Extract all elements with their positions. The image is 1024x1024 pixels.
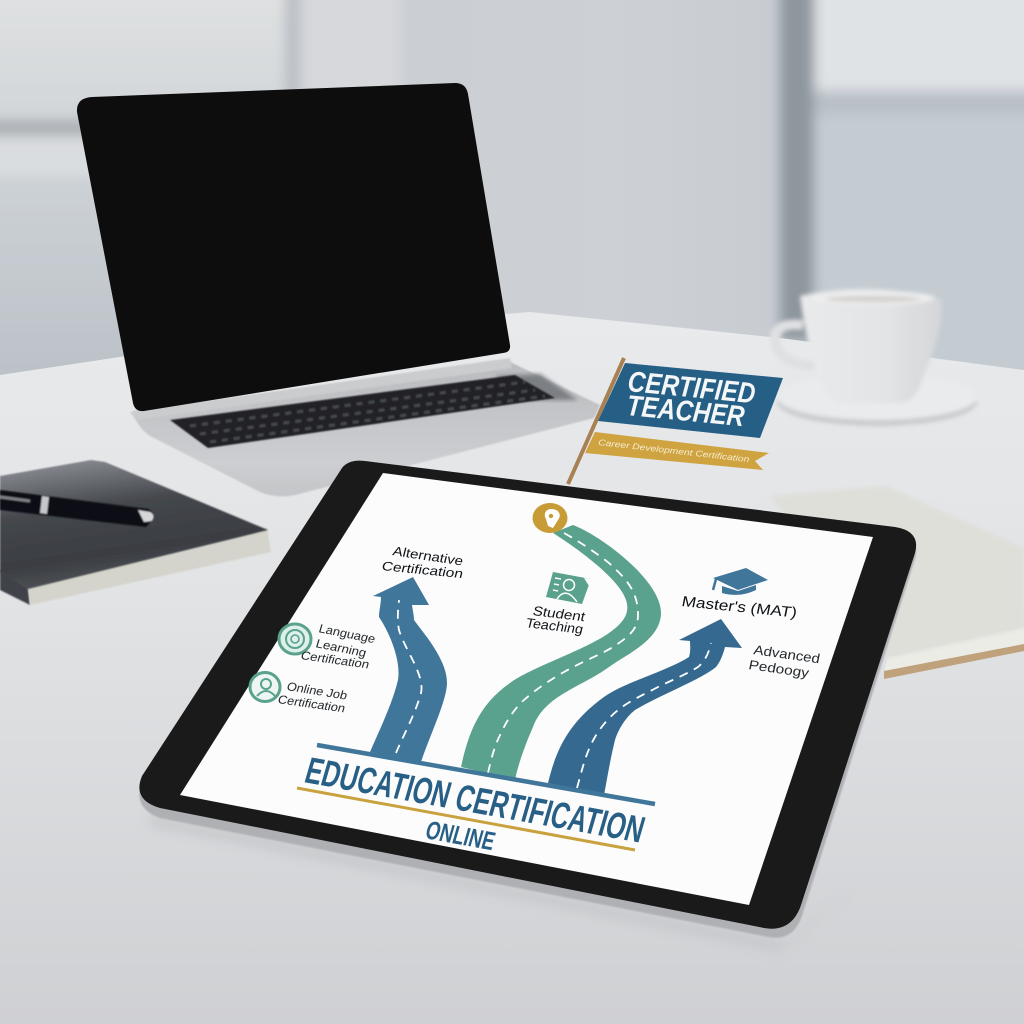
flag gold ribbon — [585, 432, 769, 470]
table surface — [0, 312, 1024, 1024]
label: language learning certification — [299, 621, 378, 671]
flag pole — [568, 358, 624, 484]
gold underline — [297, 788, 635, 850]
label: language learning certification: Certification — [299, 648, 371, 671]
subtitle: ONLINE — [422, 817, 498, 856]
flag blue panel — [598, 363, 783, 438]
label: advanced pedagogy: Pedoogy — [747, 657, 811, 680]
cup body — [800, 289, 942, 403]
saucer — [777, 378, 977, 426]
icon: student teaching — [546, 572, 591, 604]
laptop keyboard — [170, 375, 555, 448]
label: online job certification: Certification — [276, 692, 347, 715]
cup handle — [775, 325, 815, 366]
coffee cup and saucer — [775, 289, 977, 426]
label: language learning certification: Language — [317, 621, 378, 646]
tablet bezel — [139, 461, 916, 929]
pin icon at top of green road — [532, 503, 568, 533]
notebook with pen, left — [0, 460, 271, 605]
icon: graduation cap — [713, 568, 768, 595]
tablet screen — [180, 473, 873, 905]
label: student teaching: Student — [531, 603, 587, 624]
base line — [317, 745, 655, 804]
label: advanced pedagogy — [747, 642, 821, 680]
tablet soft shadow — [150, 815, 860, 950]
label: alternative certification: Alternative — [391, 543, 465, 568]
flag title: CERTIFIED — [626, 366, 757, 410]
flag: certified teacher — [568, 358, 783, 484]
notebook page strip — [884, 627, 1024, 671]
label: advanced pedagogy: Advanced — [752, 642, 821, 666]
notebook, right — [770, 486, 1024, 679]
laptop — [77, 83, 600, 496]
title: EDUCATION CERTIFICATION — [301, 749, 650, 850]
ribbon caption: Career Development Certification — [598, 437, 750, 464]
icon: language learning — [279, 624, 311, 654]
label: online job certification — [276, 679, 350, 715]
label: online job certification: Online Job — [285, 679, 350, 703]
background: blurred office wall and windows — [0, 0, 1024, 400]
laptop hinge strip — [130, 358, 512, 420]
notebook tan edge — [884, 643, 1024, 679]
road: alternative certification arrow — [370, 577, 447, 762]
icon: online job — [250, 672, 280, 702]
label: student teaching: Teaching — [524, 615, 585, 637]
laptop keyboard deck, right side — [495, 374, 578, 400]
flag title: TEACHER — [625, 390, 746, 433]
label: student teaching — [524, 603, 587, 637]
flag title — [625, 366, 757, 433]
tablet rim — [139, 467, 916, 938]
laptop base — [133, 362, 600, 496]
label: master's (MAT): Master's (MAT) — [680, 594, 798, 621]
notebook cover — [770, 486, 1024, 658]
notebook side — [0, 570, 30, 605]
label: language learning certification: Learning — [314, 636, 368, 660]
road: student teaching, green — [461, 525, 661, 780]
laptop screen — [77, 83, 510, 411]
pen — [0, 490, 154, 527]
label: alternative certification — [380, 543, 465, 581]
notebook pages — [28, 528, 271, 605]
notebook cover — [0, 460, 268, 589]
road: master's arrow — [548, 619, 742, 795]
label: alternative certification: Certification — [380, 558, 465, 581]
tablet — [139, 461, 916, 950]
infographic on tablet screen — [250, 503, 821, 856]
